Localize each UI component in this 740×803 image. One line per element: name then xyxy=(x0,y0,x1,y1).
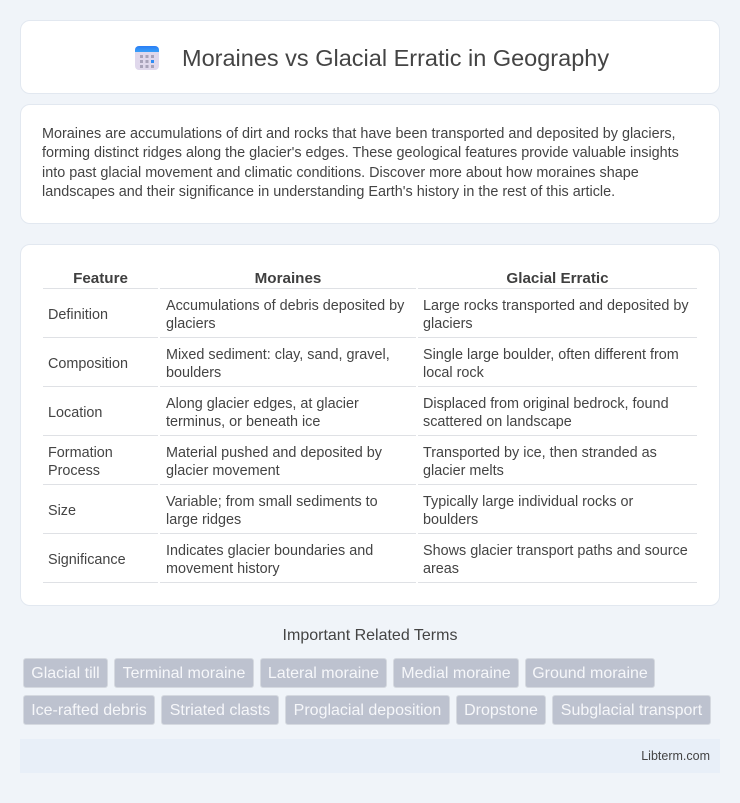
row: size: boulders xyxy=(423,512,478,528)
row: definition: Accumulations of debris deposited by xyxy=(166,298,404,314)
row: location xyxy=(48,396,669,430)
row: formation process: Transported by ice, then stranded as xyxy=(423,445,657,461)
intro paragraph xyxy=(42,126,679,200)
row: formation process: glacier movement xyxy=(166,463,280,479)
related term tags: Striated clasts xyxy=(170,702,270,719)
intro paragraph: landscapes and their significance in understanding Earth's history in the rest of this article. xyxy=(42,184,615,200)
table header: Glacial Erratic xyxy=(506,270,609,287)
table header xyxy=(73,270,609,287)
related term tags: Medial moraine xyxy=(401,665,511,682)
related term tags: Ground moraine xyxy=(532,665,648,682)
row: composition xyxy=(48,347,679,381)
row: formation process: Material pushed and deposited by xyxy=(166,445,382,461)
row: location: terminus, or beneath ice xyxy=(166,414,320,430)
row: significance: Significance xyxy=(48,552,126,568)
row: composition: local rock xyxy=(423,365,484,381)
row: formation process: glacier melts xyxy=(423,463,504,479)
row: composition: Composition xyxy=(48,356,128,372)
icon: calendar grid xyxy=(135,46,159,70)
row: formation process xyxy=(48,445,657,479)
row: composition: Mixed sediment: clay, sand, gravel, xyxy=(166,347,390,363)
panel: introduction text xyxy=(20,104,720,224)
row: size xyxy=(48,494,634,528)
row: formation process: Process xyxy=(48,463,100,479)
related term tags xyxy=(23,658,711,725)
row: formation process: Formation xyxy=(48,445,113,461)
row: definition: glaciers xyxy=(166,316,216,332)
row: definition xyxy=(48,298,689,332)
table header: Moraines xyxy=(255,270,321,287)
row: size: Size xyxy=(48,503,76,519)
row: size: Typically large individual rocks or xyxy=(423,494,633,510)
related term tags: Terminal moraine xyxy=(123,665,245,682)
row: location: Along glacier edges, at glacier xyxy=(166,396,359,412)
panel: title card xyxy=(20,20,720,94)
row: significance xyxy=(48,543,688,577)
row: definition: Large rocks transported and deposited by xyxy=(423,298,689,314)
row: definition: Definition xyxy=(48,307,108,323)
row: composition: boulders xyxy=(166,365,221,381)
intro paragraph: Moraines are accumulations of dirt and rocks that have been transported and deposited by glaciers, xyxy=(42,126,676,142)
row: composition: Single large boulder, often different from xyxy=(423,347,679,363)
row: size: large ridges xyxy=(166,512,241,528)
panel: comparison table xyxy=(20,244,720,606)
row: location: Displaced from original bedrock, found xyxy=(423,396,669,412)
comparison table xyxy=(43,270,697,583)
intro paragraph: into past glacial movement and climatic conditions. Discover more about how moraines shape xyxy=(42,165,639,181)
footer credit: Libterm.com xyxy=(641,749,710,763)
related term tags: Lateral moraine xyxy=(268,665,379,682)
related term tags: Proglacial deposition xyxy=(294,702,441,719)
heading: important related terms: Important Related Terms xyxy=(283,627,457,644)
row: location: scattered on landscape xyxy=(423,414,572,430)
row: significance: areas xyxy=(423,561,459,577)
footer bar xyxy=(20,739,720,773)
row: significance: movement history xyxy=(166,561,280,577)
related term tags: Ice-rafted debris xyxy=(31,702,147,719)
related term tags: Glacial till xyxy=(31,665,100,682)
row: size: Variable; from small sediments to xyxy=(166,494,378,510)
row: definition: glaciers xyxy=(423,316,473,332)
related term tags: Subglacial transport xyxy=(561,702,702,719)
intro paragraph: forming distinct ridges along the glacier's edges. These geological features provide valuable insights xyxy=(42,145,679,161)
row: location: Location xyxy=(48,405,102,421)
title: Moraines vs Glacial Erratic in Geography xyxy=(182,45,609,71)
related term tags: Dropstone xyxy=(464,702,538,719)
table header: Feature xyxy=(73,270,128,287)
row: significance: Shows glacier transport paths and source xyxy=(423,543,688,559)
row: significance: Indicates glacier boundaries and xyxy=(166,543,373,559)
